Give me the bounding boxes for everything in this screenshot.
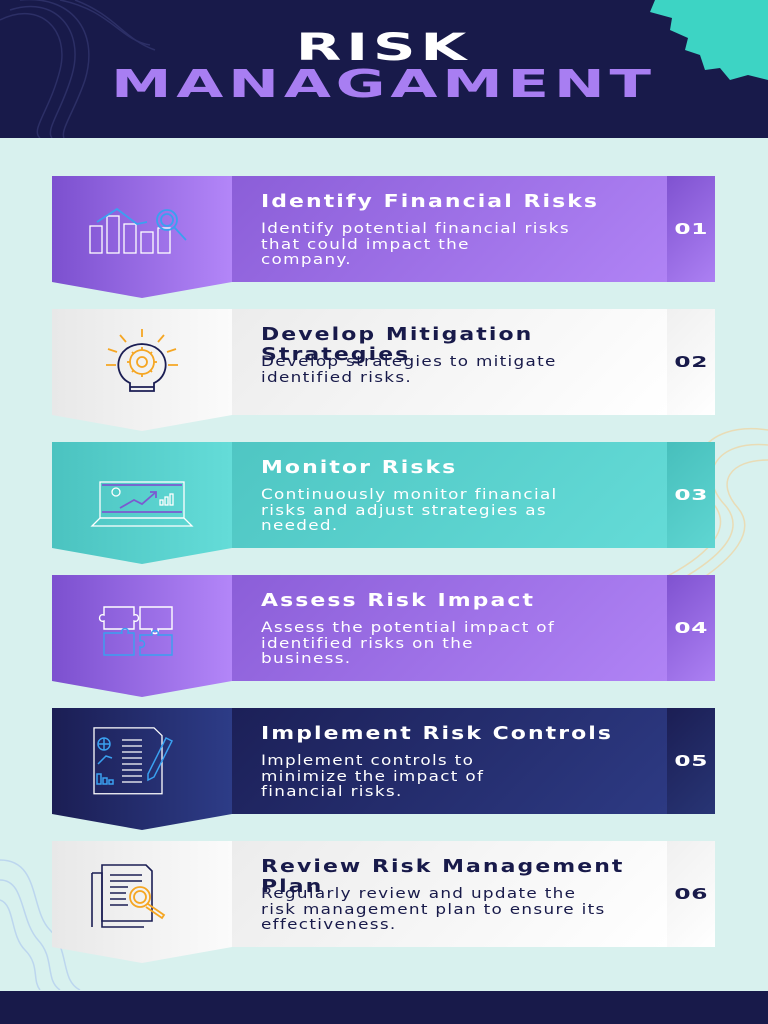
text: financial risks. xyxy=(261,784,403,800)
text: that could impact the xyxy=(261,236,470,252)
step 06: 06 xyxy=(674,885,708,903)
text xyxy=(261,753,484,800)
step 01 xyxy=(52,176,715,298)
text: Continuously monitor financial xyxy=(261,487,558,503)
heading: Implement Risk Controls xyxy=(261,723,613,744)
text: Regularly review and update the xyxy=(261,886,576,902)
icon: bar chart with magnifier xyxy=(89,208,187,254)
text xyxy=(261,221,570,268)
heading: Assess Risk Impact xyxy=(261,590,535,611)
text: Assess the potential impact of xyxy=(261,620,555,636)
step 01: 01 xyxy=(674,220,708,238)
text: risks and adjust strategies as xyxy=(261,502,547,518)
text: Identify potential financial risks xyxy=(261,221,570,237)
heading: Develop Mitigation xyxy=(261,324,533,345)
icon: report document with pen xyxy=(93,727,173,794)
heading: Identify Financial Risks xyxy=(261,191,599,212)
icon: lightbulb with gear xyxy=(106,329,178,392)
icon: laptop chart xyxy=(90,481,194,527)
icon: puzzle pieces xyxy=(98,606,173,656)
text: business. xyxy=(261,651,351,667)
step 05 xyxy=(52,708,715,830)
step 02 xyxy=(52,309,715,431)
step 02: 02 xyxy=(674,353,708,371)
step 04: 04 xyxy=(674,619,708,637)
heading xyxy=(261,856,625,897)
text xyxy=(261,354,557,386)
text: Implement controls to xyxy=(261,753,474,769)
decorative left waves xyxy=(0,859,80,990)
title: MANAGAMENT xyxy=(111,62,656,106)
step 06 xyxy=(52,841,715,963)
title: RISK xyxy=(296,26,471,69)
heading: Plan xyxy=(261,876,323,897)
text: effectiveness. xyxy=(261,917,397,933)
text: risk management plan to ensure its xyxy=(261,902,606,918)
heading: Monitor Risks xyxy=(261,457,457,478)
text: Develop strategies to mitigate xyxy=(261,354,557,370)
heading: Strategies xyxy=(261,344,410,365)
step 04 xyxy=(52,575,715,697)
step 05: 05 xyxy=(674,752,708,770)
footer band xyxy=(0,991,768,1024)
text: needed. xyxy=(261,518,339,534)
text: minimize the impact of xyxy=(261,768,484,784)
header band xyxy=(0,0,768,138)
icon: documents with magnifier xyxy=(91,864,166,928)
text xyxy=(261,487,558,534)
text: identified risks. xyxy=(261,370,412,386)
text: company. xyxy=(261,252,352,268)
step 03 xyxy=(52,442,715,564)
step 03: 03 xyxy=(674,486,708,504)
heading xyxy=(261,324,533,365)
decorative right waves xyxy=(668,428,768,575)
title xyxy=(111,26,656,106)
text: identified risks on the xyxy=(261,636,474,652)
heading: Review Risk Management xyxy=(261,856,625,877)
text xyxy=(261,620,555,667)
text xyxy=(261,886,606,933)
